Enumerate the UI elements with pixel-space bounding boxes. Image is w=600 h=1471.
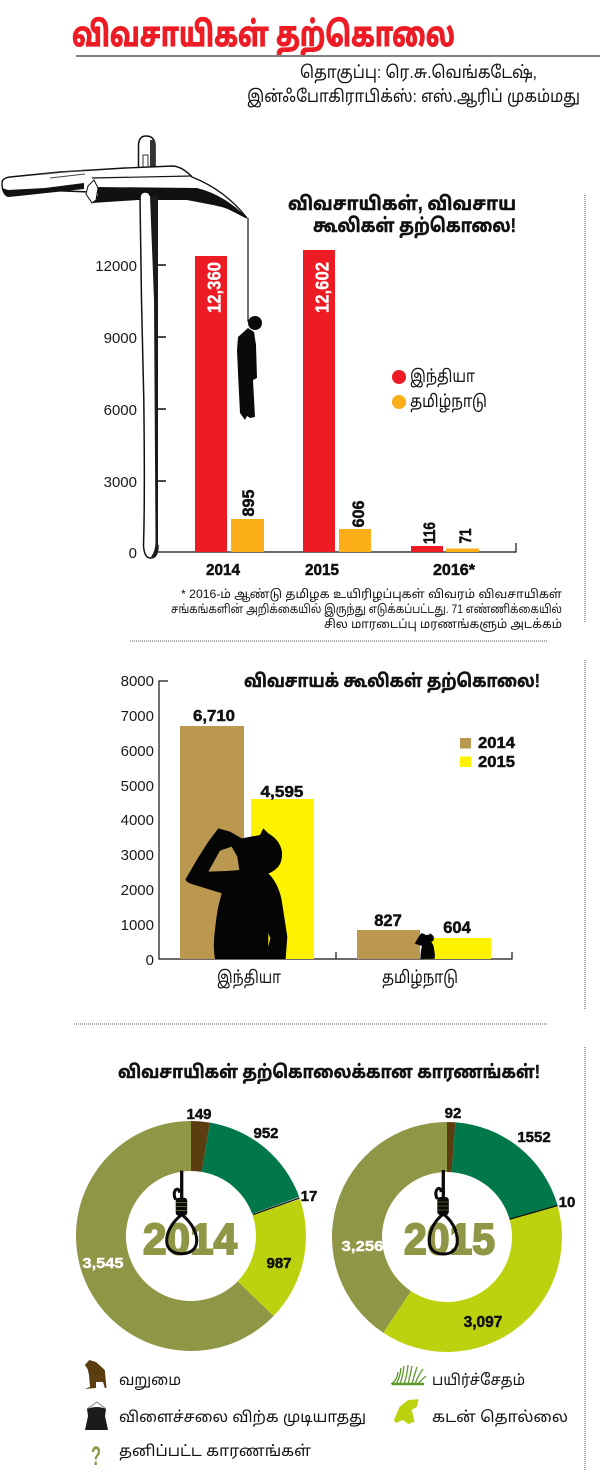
- label: unable to sell produce: விளைச்சலை விற்க முடியாதது: [119, 1409, 366, 1427]
- icon: poverty: [85, 1360, 106, 1389]
- value labels: 987: [266, 1255, 292, 1272]
- value labels: 10: [559, 1194, 575, 1211]
- y axis labels: 9000: [104, 330, 137, 347]
- y axis labels: 7000: [121, 708, 154, 725]
- donut year: 2015: [404, 1215, 495, 1264]
- y axis labels: [121, 673, 154, 969]
- chart heading: கூலிகள் தற்கொலை!: [313, 215, 516, 238]
- icon: noose: [167, 1171, 197, 1254]
- bars 2016: 116: [421, 522, 439, 544]
- y axis labels: 1000: [121, 917, 154, 934]
- title: விவசாயிகள் தற்கொலை: [72, 16, 455, 57]
- y axis labels: 8000: [121, 673, 154, 690]
- credits: [247, 63, 580, 109]
- year labels: 2016*: [433, 562, 476, 579]
- category labels: தமிழ்நாடு: [382, 968, 458, 989]
- year labels: 2015: [305, 562, 339, 579]
- y axis labels: 4000: [121, 812, 154, 829]
- value labels: 3,256: [342, 1238, 384, 1255]
- value labels: 149: [186, 1106, 212, 1123]
- credits: தொகுப்பு: ரெ.சு.வெங்கடேஷ்,: [300, 63, 537, 84]
- label: poverty: வறுமை: [119, 1372, 181, 1391]
- y axis labels: 0: [146, 952, 154, 969]
- chart heading: விவசாயிகள், விவசாய: [288, 193, 516, 215]
- bars 2015: 606: [350, 500, 368, 528]
- chart heading: [288, 193, 516, 238]
- legend: India and Tamil Nadu: [392, 367, 487, 413]
- category labels: [217, 968, 458, 989]
- rope and hanging man: [237, 218, 262, 420]
- bars 2016: 71: [457, 528, 475, 544]
- icon: debt burden figure: [394, 1399, 419, 1424]
- y axis labels: 3000: [104, 474, 137, 491]
- icon: drinking man silhouette: [186, 828, 287, 959]
- donut chart 2014: [76, 1106, 317, 1351]
- value labels: [342, 1105, 575, 1331]
- y axis labels: [95, 258, 137, 562]
- label: personal reasons: தனிப்பட்ட காரணங்கள்: [119, 1443, 311, 1461]
- bars India: 4,595: [260, 784, 304, 801]
- value labels: [82, 1106, 317, 1272]
- icon: unsold produce sack: [85, 1402, 108, 1430]
- legend: India and Tamil Nadu: இந்தியா: [410, 367, 475, 388]
- chart heading: விவசாயக் கூலிகள் தற்கொலை!: [244, 671, 540, 693]
- legend: years: 2015: [478, 754, 515, 771]
- footnote: [171, 587, 562, 632]
- footnote: சில மாரடைப்பு மரணங்களும் அடக்கம்: [324, 617, 562, 632]
- y axis labels: 0: [129, 545, 137, 562]
- footnote: * 2016-ம் ஆண்டு தமிழக உயிரிழப்புகள் விவரம் விவசாயிகள்: [181, 587, 562, 602]
- axes: [159, 681, 512, 959]
- bars Tamil Nadu: 827: [374, 912, 402, 930]
- x axis: [157, 265, 516, 552]
- value labels: 17: [301, 1188, 317, 1205]
- y axis labels: 6000: [121, 743, 154, 760]
- year labels: [206, 562, 476, 579]
- heading: causes: விவசாயிகள் தற்கொலைக்கான காரணங்கள்!: [118, 1062, 540, 1084]
- value labels: 92: [445, 1105, 461, 1122]
- value labels: 1552: [517, 1129, 551, 1146]
- y axis labels: 6000: [104, 402, 137, 419]
- panel: causes legend: [85, 1360, 568, 1471]
- icon: grass crop: [391, 1365, 426, 1384]
- category labels: இந்தியா: [217, 968, 281, 989]
- bars India: [180, 708, 314, 959]
- icon: small drinking man silhouette: [415, 933, 435, 959]
- bars 2014: [195, 256, 264, 552]
- bars Tamil Nadu: 604: [443, 919, 472, 937]
- y axis labels: 12000: [95, 258, 137, 275]
- icon: noose: [429, 1170, 457, 1254]
- bars India: 6,710: [193, 708, 235, 725]
- value labels: 3,097: [464, 1314, 502, 1331]
- value labels: 952: [253, 1125, 279, 1142]
- legend: years: 2014: [478, 735, 515, 752]
- bars 2015: [303, 250, 371, 552]
- bars 2014: 12,360: [204, 262, 224, 313]
- label: crop damage: பயிர்ச்சேதம்: [432, 1372, 525, 1390]
- y axis labels: 5000: [121, 778, 154, 795]
- bars 2015: 12,602: [312, 262, 332, 313]
- donut year: 2014: [143, 1215, 238, 1264]
- label: debt burden: கடன் தொல்லை: [432, 1409, 568, 1427]
- icon: question mark: ?: [91, 1441, 101, 1471]
- legend: India and Tamil Nadu: தமிழ்நாடு: [410, 392, 487, 413]
- y axis labels: 3000: [121, 847, 154, 864]
- bars Tamil Nadu: [357, 912, 491, 959]
- value labels: 3,545: [82, 1255, 124, 1272]
- year labels: 2014: [206, 562, 240, 579]
- panel: farm labourer suicides bar chart: [121, 671, 540, 989]
- legend: years: [460, 735, 515, 771]
- icon: pickaxe axis: [2, 136, 247, 558]
- bars 2014: 895: [240, 490, 258, 516]
- bars 2016: [411, 522, 479, 552]
- y axis labels: 2000: [121, 882, 154, 899]
- donut chart 2015: [332, 1105, 575, 1352]
- panel: farmer suicides bar chart: [2, 136, 562, 632]
